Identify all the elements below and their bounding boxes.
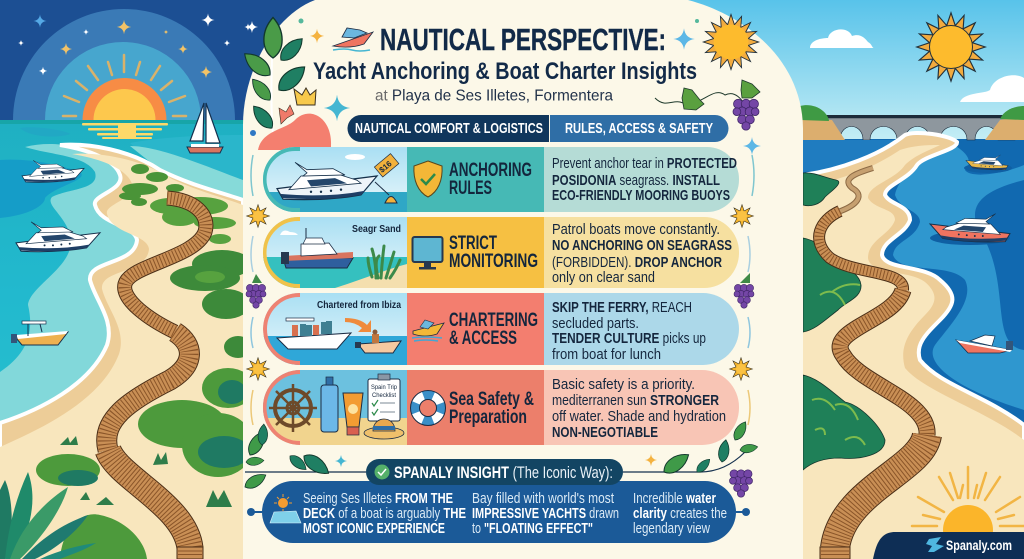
icon: shield [414,161,442,197]
sun top right [692,3,770,81]
heading: STRICT [449,233,497,254]
insight column 1: DECK of a boat is arguably THE [303,506,466,522]
insight column 2: IMPRESSIVE YACHTS drawn [472,506,619,522]
description: SKIP THE FERRY, REACH [552,299,692,316]
right scene: bridge, bay and beach [660,0,1024,559]
insight banner [247,459,750,543]
row 4: sea safety and preparation [263,370,739,445]
insight column 3: legendary view [633,521,710,537]
description: (FORBIDDEN). DROP ANCHOR [552,254,722,271]
central cream panel [243,0,803,559]
insight column 3: Incredible water [633,491,716,507]
decorative sparkles [246,18,761,155]
row 2: strict monitoring [263,217,739,288]
agave leaves bottom left [0,472,96,559]
icon: sun over water [270,494,301,523]
cloud [810,29,874,48]
description [552,299,706,363]
row 3: chartering and access [263,293,739,365]
description: Patrol boats move constantly. [552,221,720,238]
charter boat and tender image [277,318,401,353]
cloud right [960,75,1024,102]
heading: CHARTERING [449,310,538,331]
sun rays bottom right [912,467,1024,555]
description: mediterranen sun STRONGER [552,392,719,409]
bridge [825,115,1015,140]
column header bar: NAUTICAL COMFORT & LOGISTICS [355,121,543,137]
heading [449,310,538,349]
logo mark [926,537,944,552]
description: only on clear sand [552,269,655,286]
description: secluded parts. [552,315,639,332]
side ornaments: suns, grapes, brackets [242,155,758,425]
insight pill: SPANALY INSIGHT (The Iconic Way): [394,463,613,482]
subtitle: Yacht Anchoring & Boat Charter Insights [313,58,697,85]
heading: ANCHORING [449,160,532,181]
headlands [800,105,1024,140]
insight column 2: to "FLOATING EFFECT" [472,521,593,537]
insight column 3 [633,491,727,537]
label: Chartered from Ibiza [317,300,401,311]
description [552,155,737,204]
column header bar: RULES, ACCESS & SAFETY [565,121,713,137]
description: Basic safety is a priority. [552,376,695,393]
left scene: sunset beach with yachts and boardwalk [0,0,320,559]
icon: monitor [412,237,442,270]
yacht image [277,154,397,203]
column header bar [348,115,728,142]
footer badge: Spanaly.com [873,532,1024,559]
heading: Sea Safety & [449,389,534,410]
insight column 3: clarity creates the [633,506,727,522]
bushes right [803,173,885,470]
label: Seagr Sand [352,224,401,235]
beach grass tufts [60,436,232,507]
patrol boat image [280,228,353,268]
insight column 1: MOST ICONIC EXPERIENCE [303,521,445,537]
description: Prevent anchor tear in PROTECTED [552,155,737,172]
description [552,221,732,286]
heading: & ACCESS [449,328,517,349]
plant and coral decoration top left [240,18,331,150]
seagrass [368,246,400,278]
icon: boat [412,320,444,341]
description: POSIDONIA seagrass. INSTALL [552,172,720,189]
heading [449,233,538,272]
icon: title speedboat [333,28,373,51]
title: NAUTICAL PERSPECTIVE: [380,22,666,57]
insight pill [366,459,623,485]
big sun [903,0,999,95]
small boat [11,321,68,345]
safety gear image [269,374,404,439]
leafy vines around insight banner [242,419,758,497]
sailboat [187,103,223,153]
description: ECO-FRIENDLY MOORING BUOYS [552,187,730,204]
grape vine top right [655,80,760,130]
description: NON-NEGOTIABLE [552,424,658,441]
icon: lifebuoy [410,390,446,426]
bushes left [36,164,254,559]
insight column 2 [472,491,619,537]
heading: RULES [449,178,492,199]
description: from boat for lunch [552,346,661,363]
safety gear image: Spain Trip [371,384,397,391]
heading: MONITORING [449,251,538,272]
insight column 1: Seeing Ses Illetes FROM THE [303,491,453,507]
price tag: $16 [378,159,394,175]
boardwalk left [107,198,206,559]
heading [449,160,532,199]
boardwalk right [819,168,927,559]
description: NO ANCHORING ON SEAGRASS [552,237,732,254]
insight column 2: Bay filled with world's most [472,491,614,507]
heading: Preparation [449,407,527,428]
row 1: anchoring rules [263,147,739,212]
description: TENDER CULTURE picks up [552,330,706,347]
price tag [374,154,399,177]
insight column 1 [303,491,466,537]
location line: at Playa de Ses Illetes, Formentera [375,88,613,104]
title [313,22,697,85]
description [552,376,726,441]
safety gear image: Checklist [372,392,396,399]
description: off water. Shade and hydration [552,408,726,425]
small boat right [956,335,1013,353]
heading [449,389,534,428]
